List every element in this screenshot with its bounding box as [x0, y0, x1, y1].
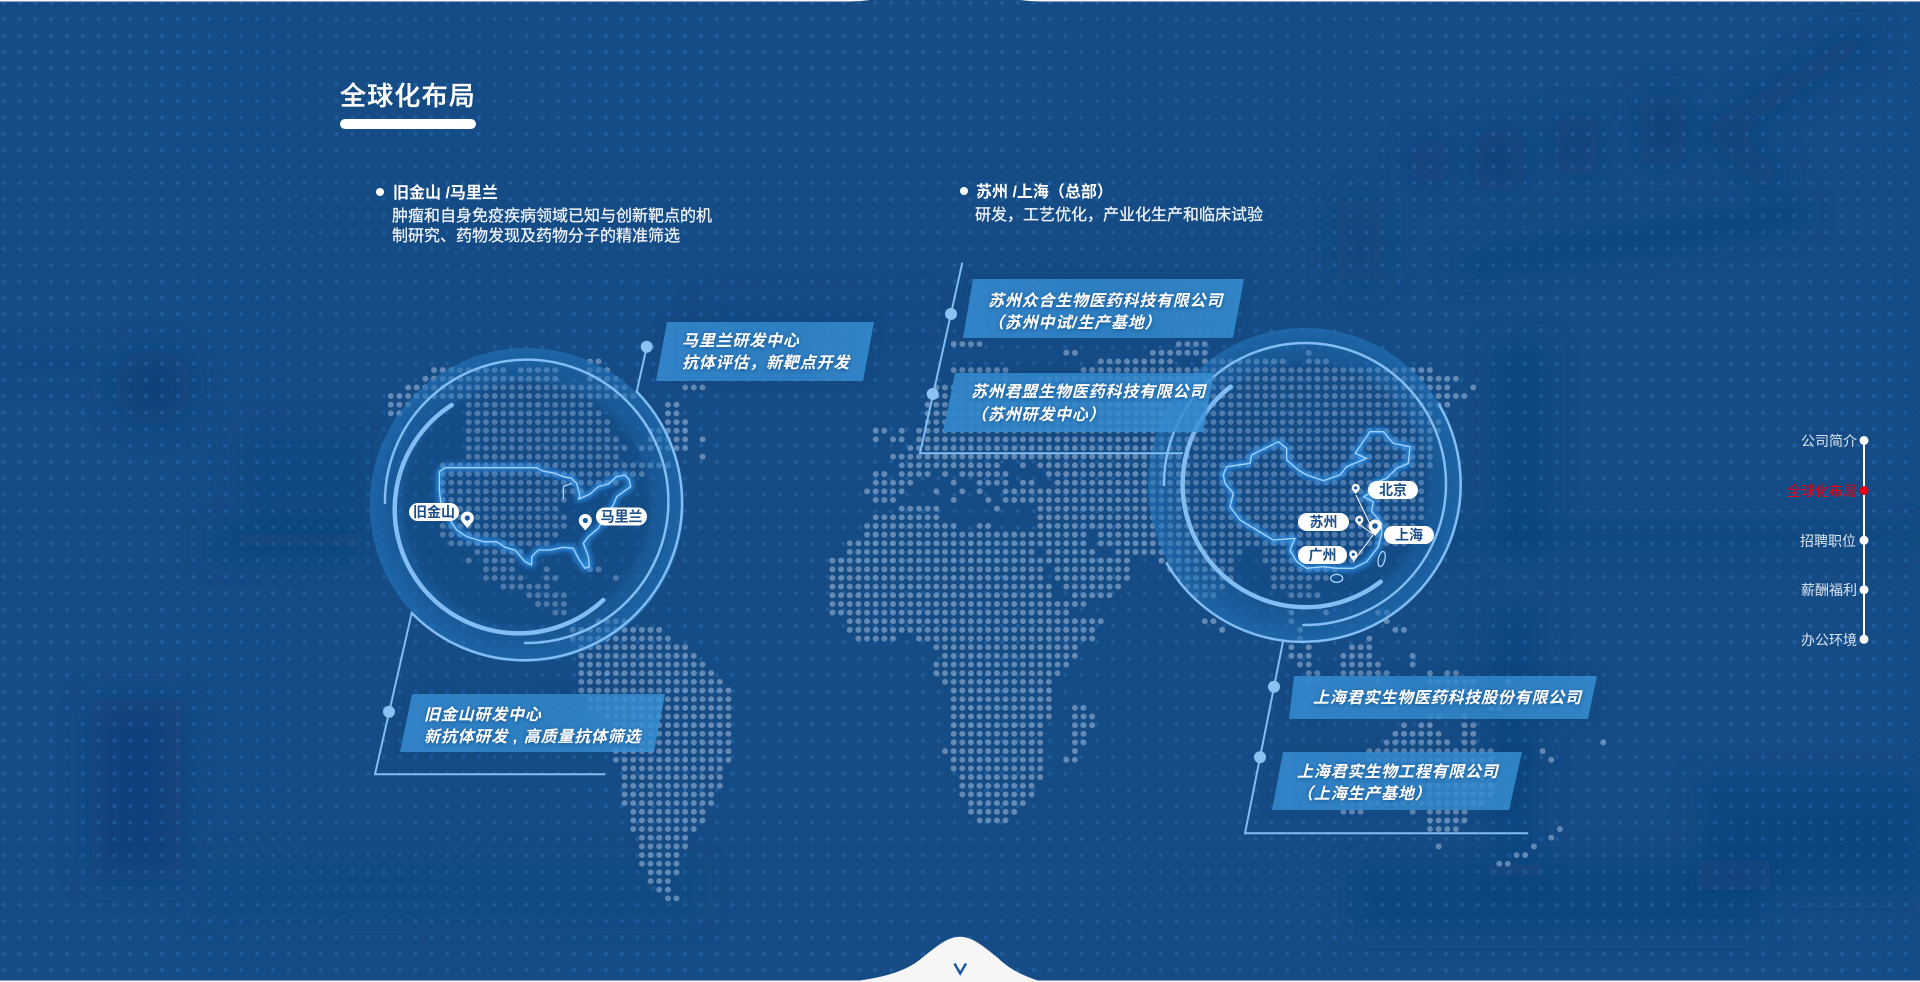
pin: Guangzhou: [1349, 550, 1357, 561]
callout: Shanghai Junshi Engineering: 上海君实生物工程有限公司: [1297, 763, 1500, 781]
side navigation: [1787, 433, 1868, 648]
label: Beijing: [1368, 481, 1418, 499]
USA outline: [439, 468, 631, 568]
callout: Shanghai Junshi Biosciences: [1289, 676, 1597, 719]
connector: Shanghai: [1245, 640, 1528, 833]
label: Shanghai: 上海: [1395, 527, 1423, 543]
pin: Maryland: [579, 514, 592, 530]
nav item: benefits: 薪酬福利: [1801, 582, 1857, 598]
text block: San Francisco / Maryland: [376, 183, 712, 245]
callout: Maryland R&D center: 抗体评估，新靶点开发: [682, 354, 851, 372]
top edge white strip: [0, 0, 1920, 2]
callout: Suzhou Zhonghe: [963, 279, 1244, 338]
label: Shanghai: [1384, 526, 1434, 544]
USA circle: [370, 348, 684, 662]
callout: Suzhou Zhonghe: 苏州众合生物医药科技有限公司: [988, 292, 1224, 310]
callout: Suzhou Junmeng: （苏州研发中心）: [971, 406, 1105, 424]
label: Guangzhou: 广州: [1308, 547, 1336, 563]
label: Suzhou: 苏州: [1310, 514, 1338, 530]
label: Suzhou: [1298, 513, 1349, 531]
pin: San Francisco: [461, 512, 474, 528]
callout: Maryland R&D center: 马里兰研发中心: [682, 332, 800, 350]
pin: Shanghai: [1368, 520, 1382, 536]
text block: San Francisco / Maryland: 肿瘤和自身免疫疾病领域已知与创新靶点的机: [392, 207, 712, 225]
text block: Suzhou / Shanghai HQ: [960, 182, 1263, 224]
disc: [1148, 328, 1462, 642]
callout: San Francisco R&D center: [400, 694, 665, 752]
pin: Beijing: [1352, 484, 1360, 494]
callout: Shanghai Junshi Biosciences: 上海君实生物医药科技股份有限公司: [1313, 689, 1583, 707]
callout: Shanghai Junshi Engineering: （上海生产基地）: [1297, 785, 1431, 803]
nav item: company: 公司简介: [1801, 433, 1857, 449]
callout: Shanghai Junshi Engineering: [1272, 752, 1522, 810]
text block: Suzhou / Shanghai HQ: 研发，工艺优化，产业化生产和临床试验: [975, 206, 1263, 224]
label: Maryland: 马里兰: [600, 508, 642, 524]
disc: [370, 348, 684, 662]
arcs: [1164, 343, 1461, 642]
connector: Maryland: [637, 341, 653, 392]
title: 全球化布局: [340, 81, 476, 111]
callout: San Francisco R&D center: 新抗体研发 , 高质量抗体筛选: [424, 728, 643, 746]
text block: San Francisco / Maryland: 制研究、药物发现及药物分子的精准筛选: [392, 226, 680, 245]
pin connector lines: [1353, 495, 1373, 562]
label: San Francisco: 旧金山: [413, 504, 455, 520]
callout: San Francisco R&D center: 旧金山研发中心: [424, 706, 542, 724]
callout: Suzhou Junmeng: 苏州君盟生物医药科技有限公司: [971, 383, 1207, 401]
China circle: [1148, 328, 1462, 642]
label: Beijing: 北京: [1379, 482, 1407, 498]
connector: Suzhou: [920, 263, 1183, 453]
arcs: [385, 360, 682, 660]
icon: down chevron: [954, 964, 966, 974]
callout: Maryland R&D center: [656, 322, 874, 381]
pin: Suzhou: [1355, 516, 1363, 526]
nav item: jobs: 招聘职位: [1800, 533, 1856, 549]
China outline: [1223, 432, 1410, 582]
nav item: office: 办公环境: [1801, 632, 1857, 648]
title: [340, 81, 476, 129]
nav item: global (active): 全球化布局: [1787, 483, 1857, 499]
connector: San Francisco: [375, 613, 605, 774]
text block: San Francisco / Maryland: 旧金山 /马里兰: [393, 183, 498, 202]
callout: Suzhou Zhonghe: （苏州中试/生产基地）: [988, 314, 1161, 332]
callout: Suzhou Junmeng: [943, 373, 1214, 432]
label: Guangzhou: [1298, 546, 1347, 564]
text block: Suzhou / Shanghai HQ: 苏州 /上海（总部）: [976, 182, 1113, 201]
bottom scroll tab with arrow: [0, 937, 1920, 982]
dotted world map: [391, 344, 1603, 898]
